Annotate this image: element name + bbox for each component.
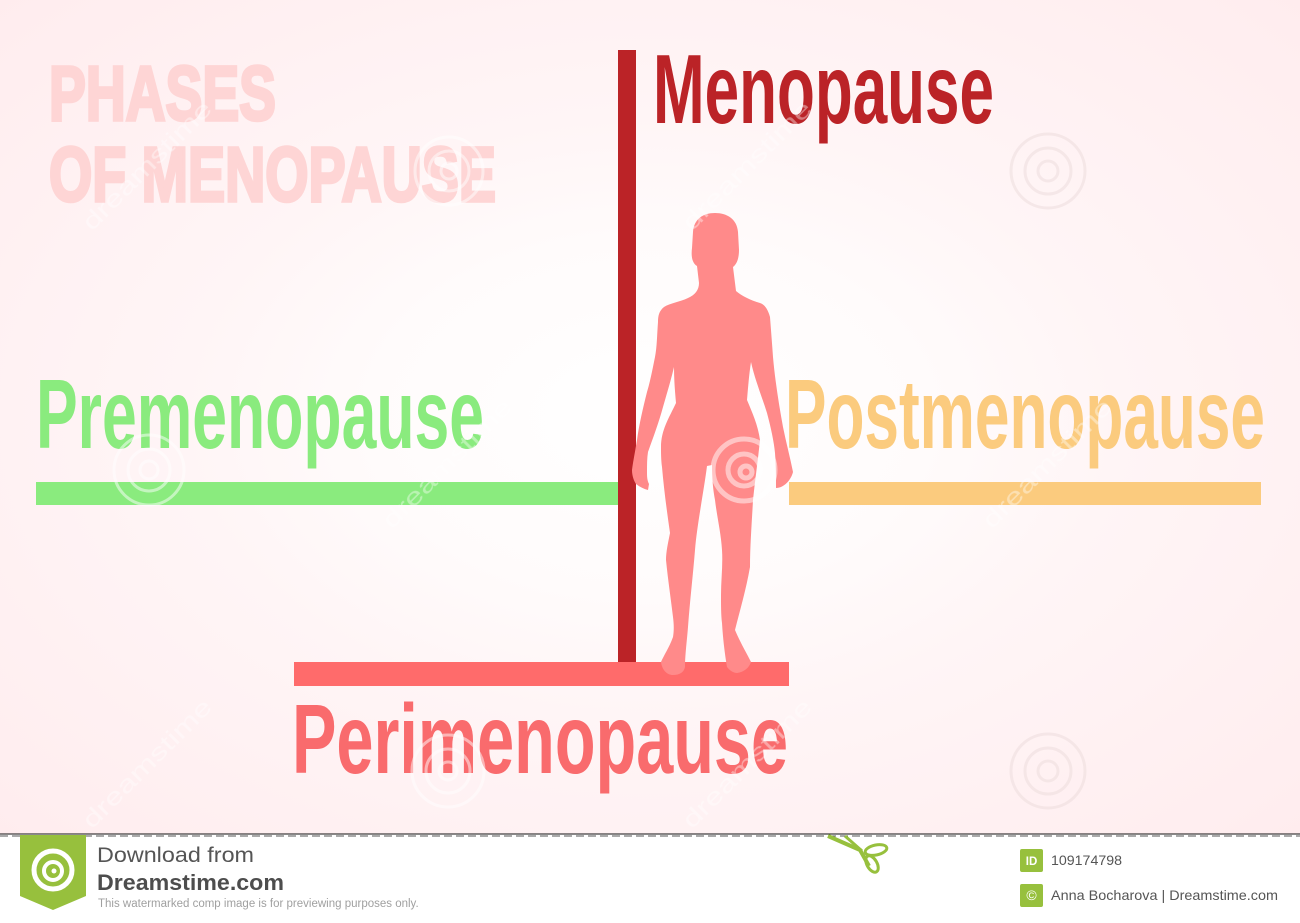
postmenopause bar	[789, 482, 1261, 505]
text: dreamstime	[977, 394, 1118, 534]
icon: dreamstime badge	[20, 835, 86, 910]
icon: female body silhouette	[632, 213, 793, 675]
text: dreamstime	[677, 96, 818, 236]
premenopause bar	[36, 482, 618, 505]
footer panel	[0, 834, 1300, 923]
text: dreamstime	[377, 394, 518, 534]
text: dreamstime	[677, 694, 818, 834]
author credit: Anna Bocharova | Dreamstime.com	[1051, 887, 1278, 903]
icon: id badge: ID	[1026, 856, 1037, 868]
menopause vertical bar	[618, 50, 636, 663]
title	[49, 51, 496, 218]
footer cut line	[0, 834, 1300, 836]
icon: id badge	[1020, 849, 1043, 872]
image id: 109174798	[1051, 852, 1122, 868]
title: OF MENOPAUSE	[49, 132, 496, 218]
icon: scissors	[828, 836, 888, 874]
text: dreamstime	[77, 96, 218, 236]
label: Perimenopause: Perimenopause	[292, 684, 788, 794]
download text: Dreamstime.com	[97, 870, 284, 895]
download text: Download from	[97, 844, 254, 867]
label: Menopause: Menopause	[653, 34, 994, 144]
icon: copyright badge	[1020, 884, 1043, 907]
watermark: spirals and diagonal text	[114, 134, 1085, 808]
title: PHASES	[49, 51, 276, 137]
download text	[97, 844, 419, 910]
text: dreamstime	[77, 694, 218, 834]
icon: copyright badge: ©	[1026, 887, 1037, 903]
label: Premenopause: Premenopause	[36, 359, 484, 469]
download text: This watermarked comp image is for previewing purposes only.	[98, 898, 419, 910]
perimenopause bar	[294, 662, 789, 686]
